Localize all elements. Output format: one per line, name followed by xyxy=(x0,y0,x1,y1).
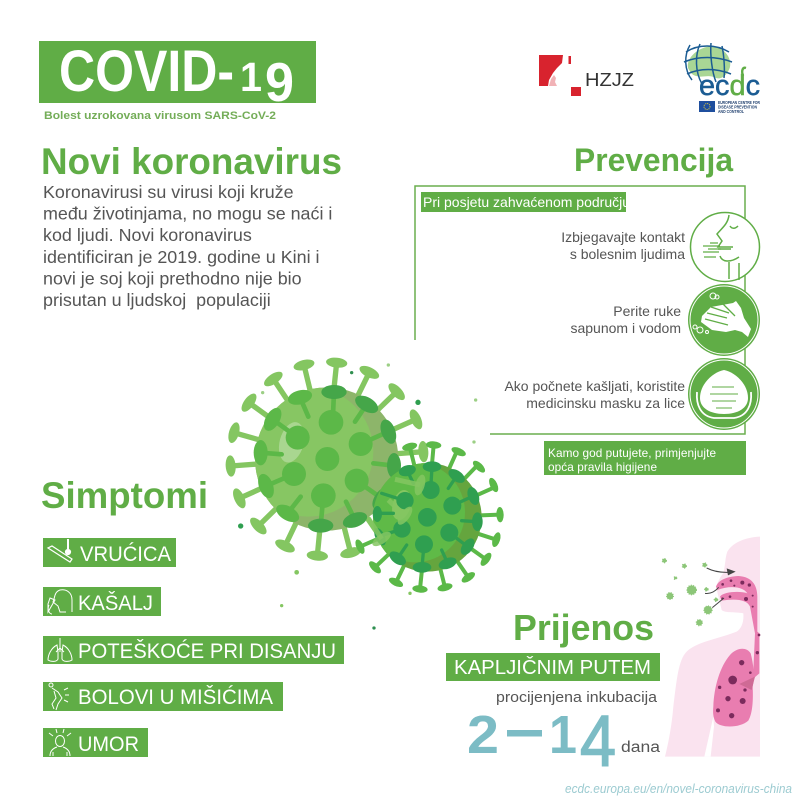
label: droplet route: KAPLJIČNIM PUTEM xyxy=(454,656,651,679)
icon: coughing head xyxy=(48,590,72,614)
heading: Novi koronavirus: Novi koronavirus xyxy=(41,141,342,182)
advice: wash hands xyxy=(570,303,681,336)
logo: ECDC: EUROPEAN CENTRE FOR xyxy=(718,100,761,105)
text: days: dana xyxy=(621,739,660,756)
advice: wear a mask: medicinsku masku za lice xyxy=(526,395,685,411)
subtitle: Bolest uzrokovana virusom SARS-CoV-2 xyxy=(44,110,276,122)
symptom: breathing difficulty: POTEŠKOĆE PRI DISANJU xyxy=(78,640,336,663)
bronchus xyxy=(739,677,755,690)
logo: ECDC: ecdc xyxy=(699,70,760,102)
heading: Simptomi: Simptomi xyxy=(41,475,208,516)
text block: intro: identificiran je 2019. godine u Kini i xyxy=(43,247,320,267)
incubation number: 2 xyxy=(467,705,499,765)
incubation number xyxy=(467,702,616,782)
text block: intro: prisutan u ljudskoj populaciji xyxy=(43,290,271,310)
title banner: COVID- xyxy=(59,39,234,104)
advice: wash hands: sapunom i vodom xyxy=(570,320,681,336)
callout: general hygiene xyxy=(544,441,746,475)
text: estimated incubation: procijenjena inkubacija xyxy=(496,689,658,706)
logo: ECDC xyxy=(684,43,761,114)
text block: intro: novi je soj koji prethodno nije bio xyxy=(43,268,302,288)
icon: person in pain xyxy=(49,683,69,710)
symptom: fever xyxy=(43,538,176,567)
icon: washing hands xyxy=(688,284,760,356)
body silhouette xyxy=(665,537,760,757)
big virus xyxy=(225,357,429,562)
advice: wear a mask xyxy=(504,378,685,411)
title banner: 1 xyxy=(240,54,262,100)
incubation number: 4 xyxy=(580,702,616,782)
text block: intro: Koronavirusi su virusi koji kruže xyxy=(43,182,294,202)
logo: HZJZ xyxy=(539,55,634,96)
symptom: cough: KAŠALJ xyxy=(78,592,153,615)
symptom: muscle pain xyxy=(43,682,283,711)
arrows xyxy=(705,568,736,608)
advice: avoid contact: s bolesnim ljudima xyxy=(570,246,685,262)
overlapping spikes of big virus xyxy=(368,473,427,549)
icon: lungs xyxy=(48,638,72,661)
incubation number: 1 xyxy=(549,705,577,765)
symptom: cough xyxy=(43,587,161,616)
logo: HZJZ: HZJZ xyxy=(585,70,634,90)
heading: Prijenos: Prijenos xyxy=(513,607,654,648)
icon: face xyxy=(690,212,760,282)
text block: intro xyxy=(43,182,332,310)
illustration: virus particles xyxy=(225,357,504,630)
droplets xyxy=(238,363,477,630)
logo: ECDC: AND CONTROL xyxy=(718,109,744,114)
text block: intro: među životinjama, no mogu se naći i xyxy=(43,204,332,224)
small virus xyxy=(354,441,504,593)
logo: ECDC: DISEASE PREVENTION xyxy=(718,104,757,110)
lung xyxy=(713,649,754,727)
callout: general hygiene: opća pravila higijene xyxy=(548,460,657,474)
airway particles xyxy=(716,579,760,718)
text block: intro: kod ljudi. Novi koronavirus xyxy=(43,225,252,245)
symptom: fatigue: UMOR xyxy=(78,733,139,756)
heading: Prevencija: Prevencija xyxy=(574,142,733,178)
advice: wear a mask: Ako počnete kašljati, koristite xyxy=(504,378,685,394)
advice: avoid contact: Izbjegavajte kontakt xyxy=(561,229,685,245)
panel: prevention box xyxy=(415,186,745,434)
title banner xyxy=(39,39,316,113)
advice: avoid contact xyxy=(561,229,685,262)
green droplets xyxy=(662,559,718,626)
callout: general hygiene: Kamo god putujete, primjenjujte xyxy=(548,446,716,460)
symptom: fatigue xyxy=(43,728,148,757)
arm gap xyxy=(704,717,714,757)
icon: thermometer xyxy=(48,539,72,562)
airway xyxy=(716,576,759,680)
illustration: respiratory transmission xyxy=(662,537,760,757)
advice: wash hands: Perite ruke xyxy=(613,303,681,319)
title banner: 9 xyxy=(265,51,294,113)
symptom: fever: VRUĆICA xyxy=(80,543,171,566)
label: visit to affected area: Pri posjetu zahvaćenom području xyxy=(423,194,630,210)
symptom: muscle pain: BOLOVI U MIŠIĆIMA xyxy=(78,686,273,709)
icon: face mask xyxy=(688,358,760,430)
icon: tired person xyxy=(49,729,71,756)
